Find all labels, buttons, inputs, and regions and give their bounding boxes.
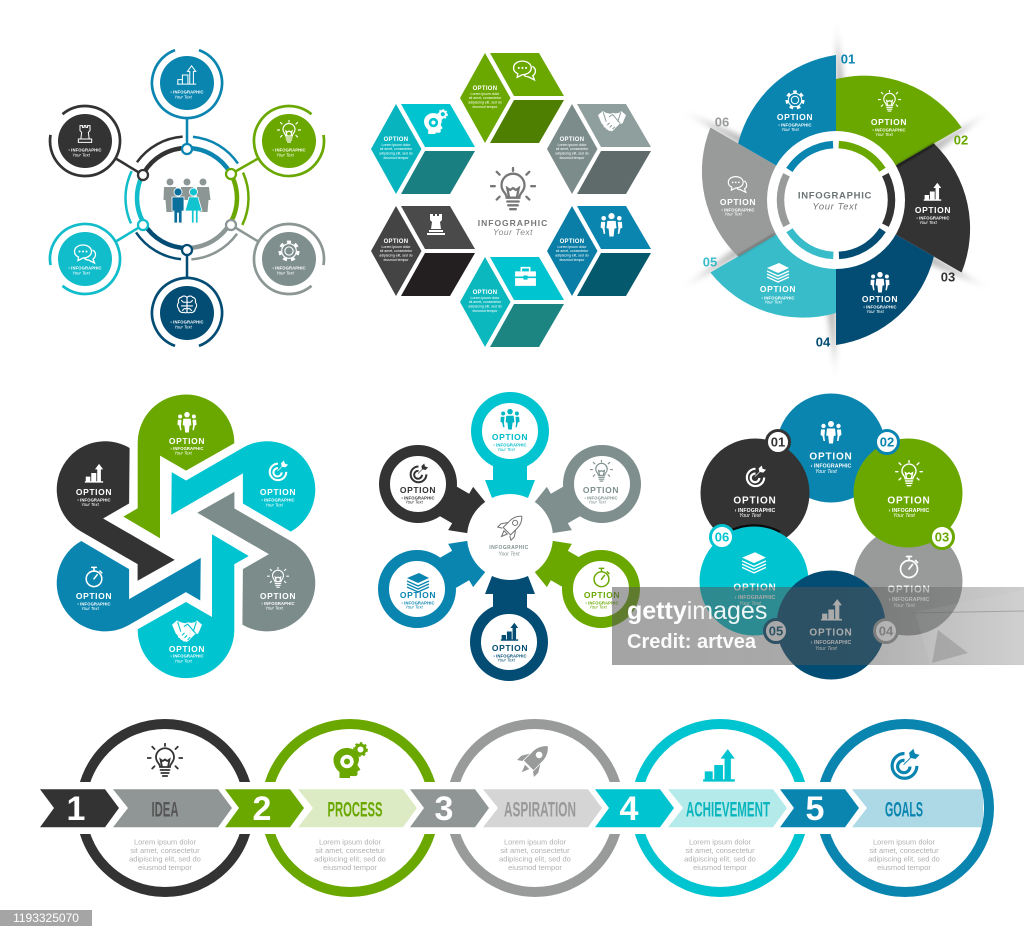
circle teal: › INFOGRAPHIC: [735, 595, 776, 601]
arrow text: green: Your Text: [174, 450, 193, 456]
node: gear: [240, 210, 338, 308]
panel: offset pie wheel: [671, 16, 1001, 384]
center rocket and title: INFOGRAPHIC: [489, 545, 529, 551]
step 1 text: adipiscing elit, sed do: [129, 854, 201, 864]
panel: overlapping circles: [700, 394, 962, 680]
step 5 text: adipiscing elit, sed do: [868, 854, 940, 864]
step 4 arrows: ACHIEVEMENT: [686, 798, 770, 822]
step 4 text: sit amet, consectetur: [685, 846, 755, 855]
circle green: Your Text: [893, 513, 915, 519]
number badges: 03: [935, 530, 949, 544]
step 2 text: Lorem ipsum dolor: [319, 838, 382, 846]
step 3 text: adipiscing elit, sed do: [499, 854, 571, 864]
step 3 text: Lorem ipsum dolor: [504, 838, 567, 846]
node: growth chart: › INFOGRAPHIC: [170, 90, 204, 94]
ring: green stopwatch: OPTION: [584, 590, 620, 600]
center bulb and title: Your Text: [493, 227, 533, 237]
arrow text: green: [169, 412, 205, 456]
arrow text: green: OPTION: [169, 436, 205, 446]
circle dark: › INFOGRAPHIC: [735, 508, 776, 514]
sector text: blue: OPTION: [777, 112, 813, 122]
ring: navy chart: OPTION: [492, 643, 528, 653]
sector text: teal: OPTION: [760, 284, 796, 294]
hex: blue people: [547, 206, 651, 296]
sector text: navy: › INFOGRAPHIC: [863, 304, 897, 310]
ring: step 4: [636, 724, 804, 892]
sector text: blue: [777, 92, 813, 132]
hex: dark rook: OPTION: [384, 239, 408, 245]
sector numbers: 05: [703, 254, 717, 270]
hex: teal briefcase: Lorem ipsum dolor: [471, 296, 500, 300]
step 2 arrows: [225, 789, 417, 828]
sector text: green: Your Text: [875, 132, 894, 137]
circle teal: Your Text: [739, 601, 761, 607]
ring: teal people: › INFOGRAPHIC: [493, 442, 527, 448]
ring: step 3: [451, 724, 619, 892]
panel: six interlocking arrows: [32, 394, 340, 678]
sector text: green: › INFOGRAPHIC: [872, 128, 906, 132]
circle teal: [700, 526, 808, 636]
arrow text: grey: › INFOGRAPHIC: [261, 601, 295, 606]
arrow text: blue: OPTION: [76, 591, 112, 601]
step 2 arrows: PROCESS: [328, 798, 382, 822]
step 1 text: Lorem ipsum dolor: [134, 838, 197, 846]
arrow text: teal upper: OPTION: [260, 487, 296, 497]
central ring with arcs and nodes: [101, 112, 273, 284]
hex: teal head: adipiscing elit, sed do: [379, 151, 413, 155]
ring: blue money: Your Text: [405, 604, 424, 610]
sector text: grey: Your Text: [724, 212, 743, 216]
hex: teal head: Lorem ipsum dolor: [382, 143, 411, 147]
sector text: navy: OPTION: [862, 294, 898, 304]
sector text: dark: OPTION: [915, 205, 951, 215]
step 5 arrows: 5: [806, 790, 824, 828]
sector numbers: 03: [941, 270, 955, 284]
circle navy: OPTION: [809, 628, 853, 638]
arrow text: teal upper: › INFOGRAPHIC: [261, 498, 295, 502]
ring: teal people: Your Text: [497, 447, 516, 452]
number badges: [710, 430, 954, 642]
circle navy: Your Text: [815, 646, 837, 652]
sector text: teal: › INFOGRAPHIC: [761, 296, 795, 300]
arrow text: blue: › INFOGRAPHIC: [77, 602, 111, 606]
step 1 text: sit amet, consectetur: [130, 846, 200, 855]
center hub with ring segments: Your Text: [812, 202, 858, 212]
circle navy: [776, 570, 886, 680]
node: gear: › INFOGRAPHIC: [272, 266, 306, 270]
sector numbers: 04: [816, 334, 831, 350]
hex: grey handshake: OPTION: [560, 137, 584, 143]
node: rook: Your Text: [72, 152, 91, 158]
number badges: 05: [769, 624, 783, 638]
ring: dark target: [384, 450, 452, 518]
circle grey: › INFOGRAPHIC: [889, 597, 930, 603]
arrow text: teal lower: [169, 620, 205, 664]
hex: teal briefcase: adipiscing elit, sed do: [468, 304, 502, 308]
number badges: 06: [715, 530, 729, 544]
sector text: green: [871, 90, 907, 137]
ring: step 2: [266, 724, 434, 892]
hex: teal head: OPTION: [384, 137, 408, 143]
hex: teal head: eiusmod tempor: [383, 156, 409, 160]
node: gear: Your Text: [276, 270, 295, 276]
icon: rocket: [513, 738, 556, 781]
circle grey: OPTION: [887, 584, 931, 596]
icon: bulb: [148, 744, 182, 776]
icon: target: [892, 749, 920, 778]
hex: teal briefcase: OPTION: [473, 290, 497, 296]
ring: dark target: Your Text: [405, 500, 424, 504]
ring: green stopwatch: [568, 556, 634, 622]
number badges: 02: [880, 434, 894, 450]
watermark banner: gettyimages: [627, 597, 767, 625]
node: growth chart: Your Text: [174, 94, 193, 100]
hex: dark rook: adipiscing elit, sed do: [379, 253, 413, 257]
circle grey: Your Text: [893, 603, 915, 609]
center rocket and title: [489, 510, 529, 558]
image id tag: [0, 910, 92, 926]
step 1 text: eiusmod tempor: [138, 863, 192, 872]
ring: grey bulb: Your Text: [588, 500, 607, 504]
arrow text: dark: OPTION: [76, 487, 112, 497]
panel: hub and spoke diagram: [36, 38, 338, 358]
sector text: dark: Your Text: [919, 220, 938, 225]
circle grey: [854, 526, 962, 636]
step 2 text: adipiscing elit, sed do: [314, 854, 386, 864]
circle blue: › INFOGRAPHIC: [811, 464, 852, 470]
step 4 text: adipiscing elit, sed do: [684, 854, 756, 864]
sector edge shading: [738, 144, 934, 256]
center hub with ring segments: [759, 123, 913, 277]
node: brain: › INFOGRAPHIC: [170, 320, 204, 324]
sector numbers: 01: [841, 52, 855, 66]
arrow text: blue: Your Text: [81, 606, 100, 611]
node: brain: Your Text: [174, 324, 193, 330]
icon: head with gears: [334, 743, 367, 778]
sector numbers: [703, 52, 968, 350]
arrow text: teal upper: Your Text: [265, 502, 284, 508]
node: chat: [44, 218, 126, 300]
node: growth chart: [142, 38, 232, 128]
hex: teal briefcase: [460, 257, 564, 347]
image id tag: 1193325070: [13, 911, 79, 925]
hex: dark rook: [371, 206, 475, 296]
hex: grey handshake: [547, 104, 651, 194]
sector text: navy: Your Text: [866, 309, 885, 314]
ring: blue money: [384, 556, 450, 622]
ring: step 5: [821, 724, 989, 892]
panel: five step process: [40, 724, 989, 892]
circle dark: Your Text: [739, 513, 761, 519]
center bulb and title: INFOGRAPHIC: [478, 218, 548, 228]
ring: grey bulb: [568, 450, 636, 518]
step 5 text: Lorem ipsum dolor: [873, 838, 936, 846]
step 3 arrows: ASPIRATION: [504, 798, 576, 822]
sector text: grey: [720, 177, 756, 216]
step 2 text: [314, 838, 386, 872]
ring: teal people: [476, 398, 544, 464]
hex: teal head: sit amet, consectetur: [380, 147, 413, 151]
arrow text: teal lower: OPTION: [169, 644, 205, 654]
number badges: 01: [771, 434, 785, 450]
node: chat: › INFOGRAPHIC: [68, 266, 102, 270]
circle green: OPTION: [887, 496, 931, 506]
step 4 text: [684, 838, 756, 872]
step 5 arrows: [780, 789, 923, 828]
hex: green chat: [460, 53, 564, 143]
ring: dark target: › INFOGRAPHIC: [401, 496, 435, 500]
step 4 arrows: 4: [620, 790, 639, 828]
circle dark: OPTION: [733, 496, 777, 506]
ring: teal people: OPTION: [492, 432, 528, 442]
ring: navy chart: [476, 608, 542, 676]
step 1 arrows: 1: [67, 790, 85, 828]
hex: blue people: eiusmod tempor: [559, 258, 585, 262]
hex: green chat: OPTION: [473, 86, 497, 92]
ring: dark target: OPTION: [400, 485, 436, 495]
watermark banner: [612, 587, 1024, 665]
node: idea bulb: [248, 100, 330, 182]
sector text: teal: Your Text: [764, 300, 783, 304]
sector drop shadows: [672, 16, 1000, 384]
ring: blue money: OPTION: [400, 590, 436, 600]
sector text: green: OPTION: [871, 117, 907, 127]
sector text: grey: OPTION: [720, 197, 756, 207]
hex: blue people: Lorem ipsum dolor: [558, 245, 587, 249]
step 4 arrows: [595, 789, 787, 828]
arrow text: grey: [260, 567, 296, 610]
hex: green chat: adipiscing elit, sed do: [468, 100, 502, 104]
hex: grey handshake: Lorem ipsum dolor: [558, 143, 587, 147]
arrow text: green: › INFOGRAPHIC: [170, 446, 204, 451]
number badges: 04: [879, 624, 894, 638]
circle navy: › INFOGRAPHIC: [811, 640, 852, 646]
panel: ring gears around rocket: [384, 398, 636, 676]
ring: step 1: [81, 724, 249, 892]
node: rook: › INFOGRAPHIC: [68, 148, 102, 152]
step 5 text: [868, 838, 940, 872]
watermark banner: Credit: artvea: [627, 631, 757, 653]
node: idea bulb: Your Text: [276, 152, 295, 158]
step 4 text: Lorem ipsum dolor: [689, 838, 752, 846]
step 5 text: sit amet, consectetur: [869, 846, 939, 855]
arrow text: grey: Your Text: [265, 606, 284, 610]
step 3 text: [499, 838, 571, 872]
connector stems: [435, 465, 585, 609]
hex: green chat: eiusmod tempor: [472, 105, 498, 109]
arrow shapes: [32, 394, 340, 678]
node: chat: Your Text: [72, 270, 91, 276]
step 4 text: eiusmod tempor: [693, 863, 747, 872]
hex: blue people: adipiscing elit, sed do: [555, 253, 589, 257]
ring: green stopwatch: Your Text: [589, 604, 608, 610]
sector text: teal: [760, 263, 796, 304]
arrow text: dark: Your Text: [81, 502, 100, 507]
ring: grey bulb: OPTION: [583, 485, 619, 495]
step 1 arrows: IDEA: [152, 798, 178, 822]
sector text: grey: › INFOGRAPHIC: [721, 208, 755, 212]
circle green: [854, 438, 962, 548]
step 1 arrows: [40, 789, 232, 828]
step 3 arrows: 3: [435, 790, 453, 828]
hex: green chat: Lorem ipsum dolor: [471, 92, 500, 96]
circle teal: OPTION: [733, 582, 777, 594]
icon: chart: [703, 749, 735, 782]
arrow text: grey: OPTION: [260, 591, 296, 601]
ring: navy chart: › INFOGRAPHIC: [493, 654, 527, 658]
node: brain: [142, 268, 232, 358]
ring: blue money: › INFOGRAPHIC: [401, 600, 435, 606]
node: idea bulb: › INFOGRAPHIC: [272, 148, 306, 152]
step 2 text: sit amet, consectetur: [315, 846, 385, 855]
arrow text: teal upper: [260, 460, 296, 508]
hex: grey handshake: adipiscing elit, sed do: [555, 151, 589, 155]
hex: blue people: OPTION: [560, 239, 584, 245]
ring: navy chart: Your Text: [497, 658, 516, 662]
center rocket and title: Your Text: [499, 552, 520, 558]
circle blue: OPTION: [809, 452, 853, 462]
hex: teal briefcase: sit amet, consectetur: [469, 300, 502, 304]
arrow text: teal lower: › INFOGRAPHIC: [170, 654, 204, 658]
ring: grey bulb: › INFOGRAPHIC: [584, 496, 618, 500]
hex: dark rook: Lorem ipsum dolor: [382, 245, 411, 249]
node: rook: [36, 92, 134, 190]
circle dark: [700, 438, 810, 548]
sector text: dark: › INFOGRAPHIC: [916, 216, 950, 220]
icon: team of people: [164, 178, 210, 223]
panel: hexagon cubes: [371, 53, 651, 347]
step 3 text: eiusmod tempor: [508, 863, 562, 872]
step 5 text: eiusmod tempor: [877, 863, 931, 872]
step 3 text: sit amet, consectetur: [500, 846, 570, 855]
step 5 arrows: GOALS: [885, 798, 923, 822]
circle blue: Your Text: [815, 469, 837, 475]
hex: teal briefcase: eiusmod tempor: [472, 309, 498, 313]
arrow text: teal lower: Your Text: [174, 658, 193, 664]
hex: dark rook: sit amet, consectetur: [380, 249, 413, 253]
arrow text: dark: › INFOGRAPHIC: [77, 498, 111, 502]
circle blue: [776, 394, 886, 502]
center hub with ring segments: INFOGRAPHIC: [798, 190, 872, 202]
hex: grey handshake: eiusmod tempor: [559, 156, 585, 160]
step 2 text: eiusmod tempor: [323, 863, 377, 872]
step 2 arrows: 2: [253, 790, 271, 828]
hex: blue people: sit amet, consectetur: [556, 249, 589, 253]
step 3 arrows: [410, 789, 602, 828]
sector text: blue: › INFOGRAPHIC: [778, 122, 812, 128]
sector text: navy: [862, 272, 898, 314]
hex: dark rook: eiusmod tempor: [383, 258, 409, 262]
arrow text: dark: [76, 464, 112, 507]
circle green: › INFOGRAPHIC: [889, 508, 930, 514]
hex: grey handshake: sit amet, consectetur: [556, 147, 589, 151]
sector numbers: 02: [954, 132, 968, 148]
hex: teal head: [371, 104, 475, 194]
step 1 text: [129, 838, 201, 872]
arrow text: blue: [76, 567, 112, 611]
label bar: goals: [852, 789, 983, 827]
sector text: dark: [915, 183, 951, 225]
sector numbers: 06: [715, 114, 729, 130]
hex: green chat: sit amet, consectetur: [469, 96, 502, 100]
ring: green stopwatch: › INFOGRAPHIC: [585, 600, 619, 606]
center bulb and title: [478, 168, 548, 237]
sector text: blue: Your Text: [781, 127, 800, 132]
pie sectors: [671, 32, 1001, 368]
